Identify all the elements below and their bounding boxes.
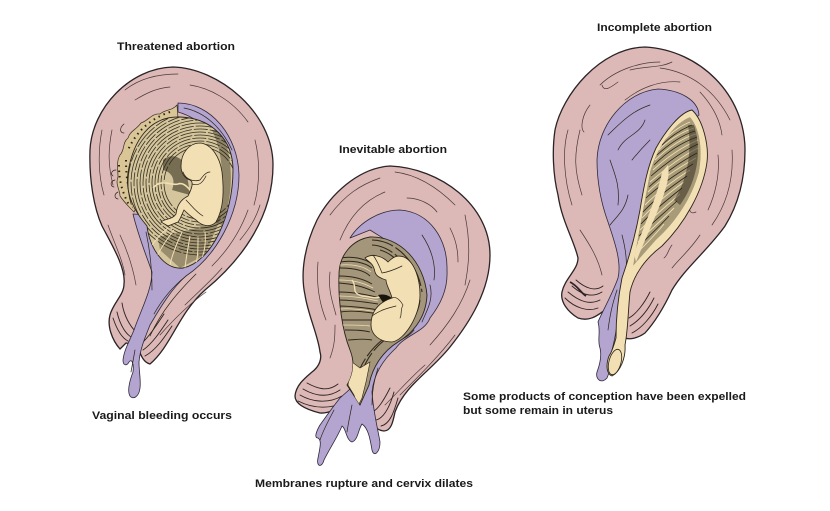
amniotic contour lines bbox=[320, 235, 434, 440]
placental villi bbox=[111, 124, 124, 199]
dark shading bbox=[163, 156, 190, 195]
arcing amnion streaks bbox=[128, 117, 233, 256]
amniotic fluid and bleeding bbox=[123, 103, 239, 398]
retained sac bbox=[606, 110, 707, 376]
uterine wall contour lines bbox=[565, 62, 732, 275]
caption: products of conception bbox=[463, 391, 746, 417]
cervical lip folds bbox=[565, 280, 658, 333]
illustration: inevitable abortion bbox=[295, 166, 490, 465]
uterine wall contour lines bbox=[99, 74, 260, 335]
uterus wall bbox=[553, 47, 745, 339]
caption: membranes rupture: Membranes rupture and cervix dilates bbox=[255, 478, 473, 490]
cervical lip folds bbox=[113, 303, 172, 356]
caption: vaginal bleeding: Vaginal bleeding occurs bbox=[92, 410, 232, 422]
fetal limb details bbox=[372, 255, 403, 318]
illustration: threatened abortion bbox=[90, 67, 273, 398]
uterus wall bbox=[90, 67, 273, 364]
gestational sac bbox=[127, 116, 234, 269]
expelled tissue tip bbox=[606, 348, 624, 376]
caption: products of conception: but some remain in uterus bbox=[463, 405, 613, 417]
umbilical cord bbox=[153, 183, 192, 192]
amniotic fluid and bleeding bbox=[316, 210, 447, 465]
caption: products of conception: Some products of conception have been expelled bbox=[463, 391, 746, 403]
fibrous inner tissue bbox=[633, 117, 701, 266]
amniotic contour lines bbox=[608, 105, 650, 350]
heading: inevitable abortion: Inevitable abortion bbox=[339, 144, 447, 156]
blood channel lines bbox=[131, 108, 232, 372]
placenta bbox=[117, 105, 178, 212]
placenta speckles bbox=[119, 112, 172, 205]
fetus bbox=[161, 143, 223, 226]
uterine wall contour lines bbox=[317, 172, 470, 405]
fetus bbox=[365, 255, 420, 342]
uterus wall bbox=[295, 166, 490, 431]
heading: incomplete abortion: Incomplete abortion bbox=[597, 22, 712, 34]
amniotic fluid and blood bbox=[597, 89, 699, 381]
gestational sac bbox=[339, 237, 427, 406]
fetal limb details bbox=[183, 172, 210, 216]
heading: threatened abortion: Threatened abortion bbox=[117, 41, 235, 53]
cervical lip folds bbox=[298, 383, 398, 426]
illustration: incomplete abortion bbox=[553, 47, 745, 381]
